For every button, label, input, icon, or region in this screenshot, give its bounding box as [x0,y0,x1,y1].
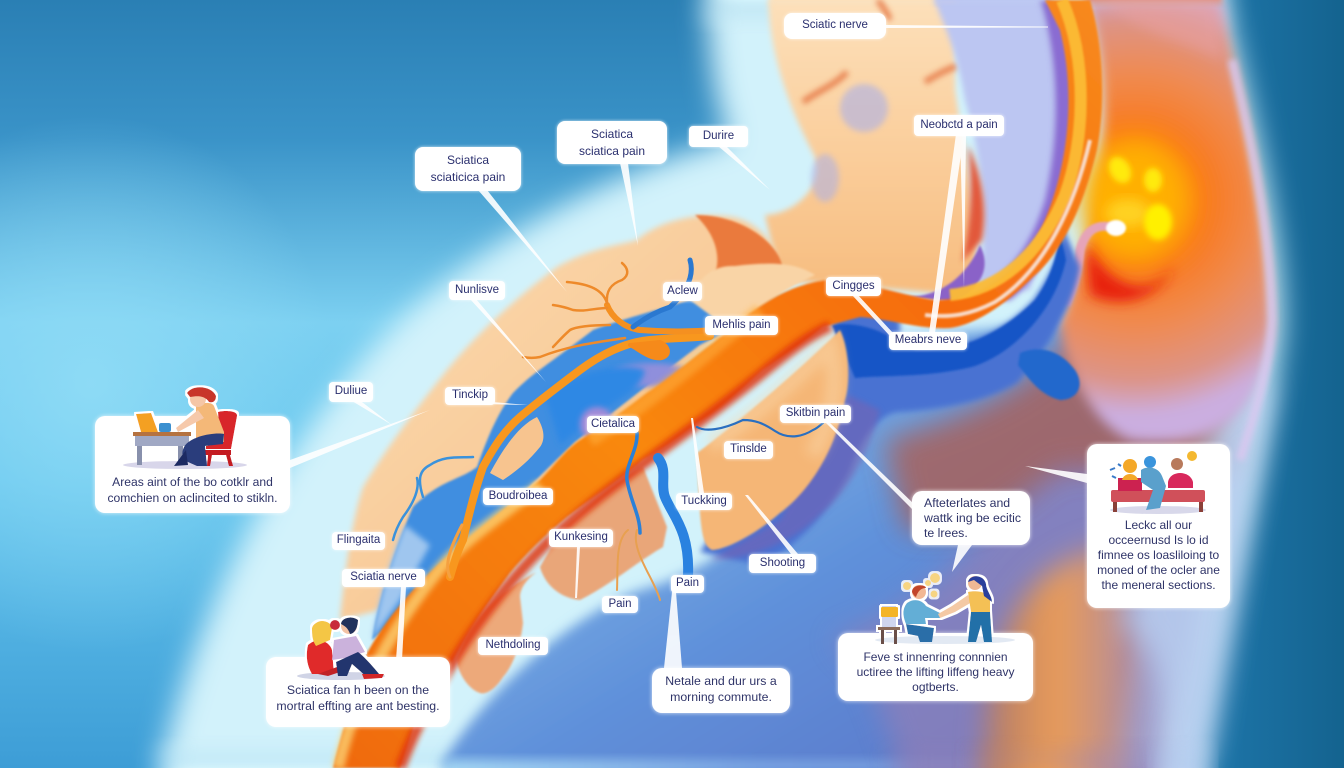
callout: sections: the meneral sections. [1101,578,1216,592]
label: Pain left [602,596,638,613]
label: Nethdoling [478,637,548,655]
label: Meabrs neve [889,332,967,350]
callout: morning sitting: Sciatica fan h been on the [287,683,429,697]
label: Sciatia nerve: Sciatia nerve [350,571,417,583]
thin blue vessels [393,260,823,600]
label: Durire [689,126,748,147]
callout: morning commute [652,668,790,713]
label: Shooting [749,554,816,573]
label: Sciatica sciaticica pain: sciaticica pain [431,170,505,184]
label: Cingges: Cingges [832,280,875,292]
icon: couple sitting [297,617,385,680]
callout: desk sitting: Areas aint of the bo cotklr and [112,475,273,489]
callout: sections: occeernusd Is lo id [1108,533,1209,547]
label: Skitbin pain [780,405,851,423]
icon: two people shaking hands [875,573,1015,644]
label: Boudroibea [483,488,553,505]
callout: morning sitting: mortral effting are ant besting. [276,698,440,712]
callout: sections: moned of the ocler ane [1097,563,1220,577]
callout: desk sitting [95,416,290,513]
callout: sections: fimnee os loasliloing to [1098,548,1219,562]
label: Sciatica sciaticica pain: Sciatica [447,153,489,167]
label: Sciatic nerve [784,13,886,39]
lower body blue and lavender [440,320,1272,768]
label: Nethdoling: Nethdoling [486,639,540,651]
label: Aclew: Aclew [667,285,698,297]
label: Cingges [826,277,881,296]
label: Sciatica sciatica pain [557,121,667,164]
callout: aftereffects [912,491,1030,545]
label: Shooting: Shooting [760,557,805,569]
callout: morning commute: morning commute. [670,690,772,704]
icon: person at desk [123,387,247,469]
label: Meabrs neve: Meabrs neve [895,334,961,346]
label: Sciatic nerve: Sciatic nerve [802,19,868,31]
blue vessel under nerve [372,300,730,640]
label: Kunkesing: Kunkesing [554,531,608,543]
label: Nunlisve: Nunlisve [455,284,499,296]
callout: morning commute: Netale and dur urs a [665,674,777,688]
callout: lifting heavy objects: ogtberts. [912,680,959,694]
leader lines [290,25,1087,668]
label: Cietalica: Cietalica [591,418,635,430]
hip glow [1060,0,1272,460]
label: Skitbin pain: Skitbin pain [786,407,845,419]
lower muscle fans [457,330,848,693]
label: Boudroibea: Boudroibea [489,490,547,502]
label: Sciatica sciaticica pain [415,147,521,191]
label: Neobctd a pain [914,115,1004,136]
label: Pain right [671,575,704,593]
callout: aftereffects: wattk ing be ecitic [924,511,1021,525]
label: Nunlisve [449,281,505,300]
callout: desk sitting: comchien on aclincited to stikln. [107,490,278,504]
label: Kunkesing [549,529,613,547]
callout: aftereffects: te lrees. [924,526,968,540]
buttock muscle [340,215,815,620]
label: Tinckip [445,387,495,405]
label: Sciatia nerve [342,569,425,587]
label: Flingaita: Flingaita [337,534,380,546]
label: Tinslde: Tinslde [730,443,767,455]
label: Mehlis pain: Mehlis pain [712,319,771,331]
orange branch nerve [448,263,715,577]
callout: morning sitting [266,657,450,727]
callout: aftereffects: Afteterlates and [924,496,1010,510]
label: Pain left: Pain [608,598,632,610]
callout: lifting heavy objects [838,633,1033,701]
callout: sections: Leckc all our [1125,518,1192,532]
label: Mehlis pain [705,316,778,335]
callout: lifting heavy objects: uctiree the lifting liffeng heavy [857,665,1014,679]
label: Tuckking [676,493,732,510]
callout: lifting heavy objects: Feve st innenring connnien [863,650,1008,664]
label: Tinslde [724,441,773,459]
label: Durire: Durire [703,130,734,142]
label: Sciatica sciatica pain: Sciatica [591,126,633,140]
callout: sections [1087,444,1230,608]
label: Tinckip: Tinckip [452,389,488,401]
label: Flingaita [332,532,385,550]
sciatic nerve main band [333,0,1102,768]
label: Neobctd a pain: Neobctd a pain [920,119,998,131]
label: Cietalica [587,416,639,433]
label: Sciatica sciatica pain: sciatica pain [579,144,645,158]
label: Tuckking: Tuckking [681,495,727,507]
dark blue band under nerve and purple ring [700,225,1080,565]
label: Duliue: Duliue [335,385,367,397]
icon: people on sofa [1110,451,1206,514]
upper spine and peach tissue [765,0,1078,302]
label: Duliue [329,382,373,402]
label: Aclew [663,282,702,301]
label: Pain right: Pain [676,577,699,589]
